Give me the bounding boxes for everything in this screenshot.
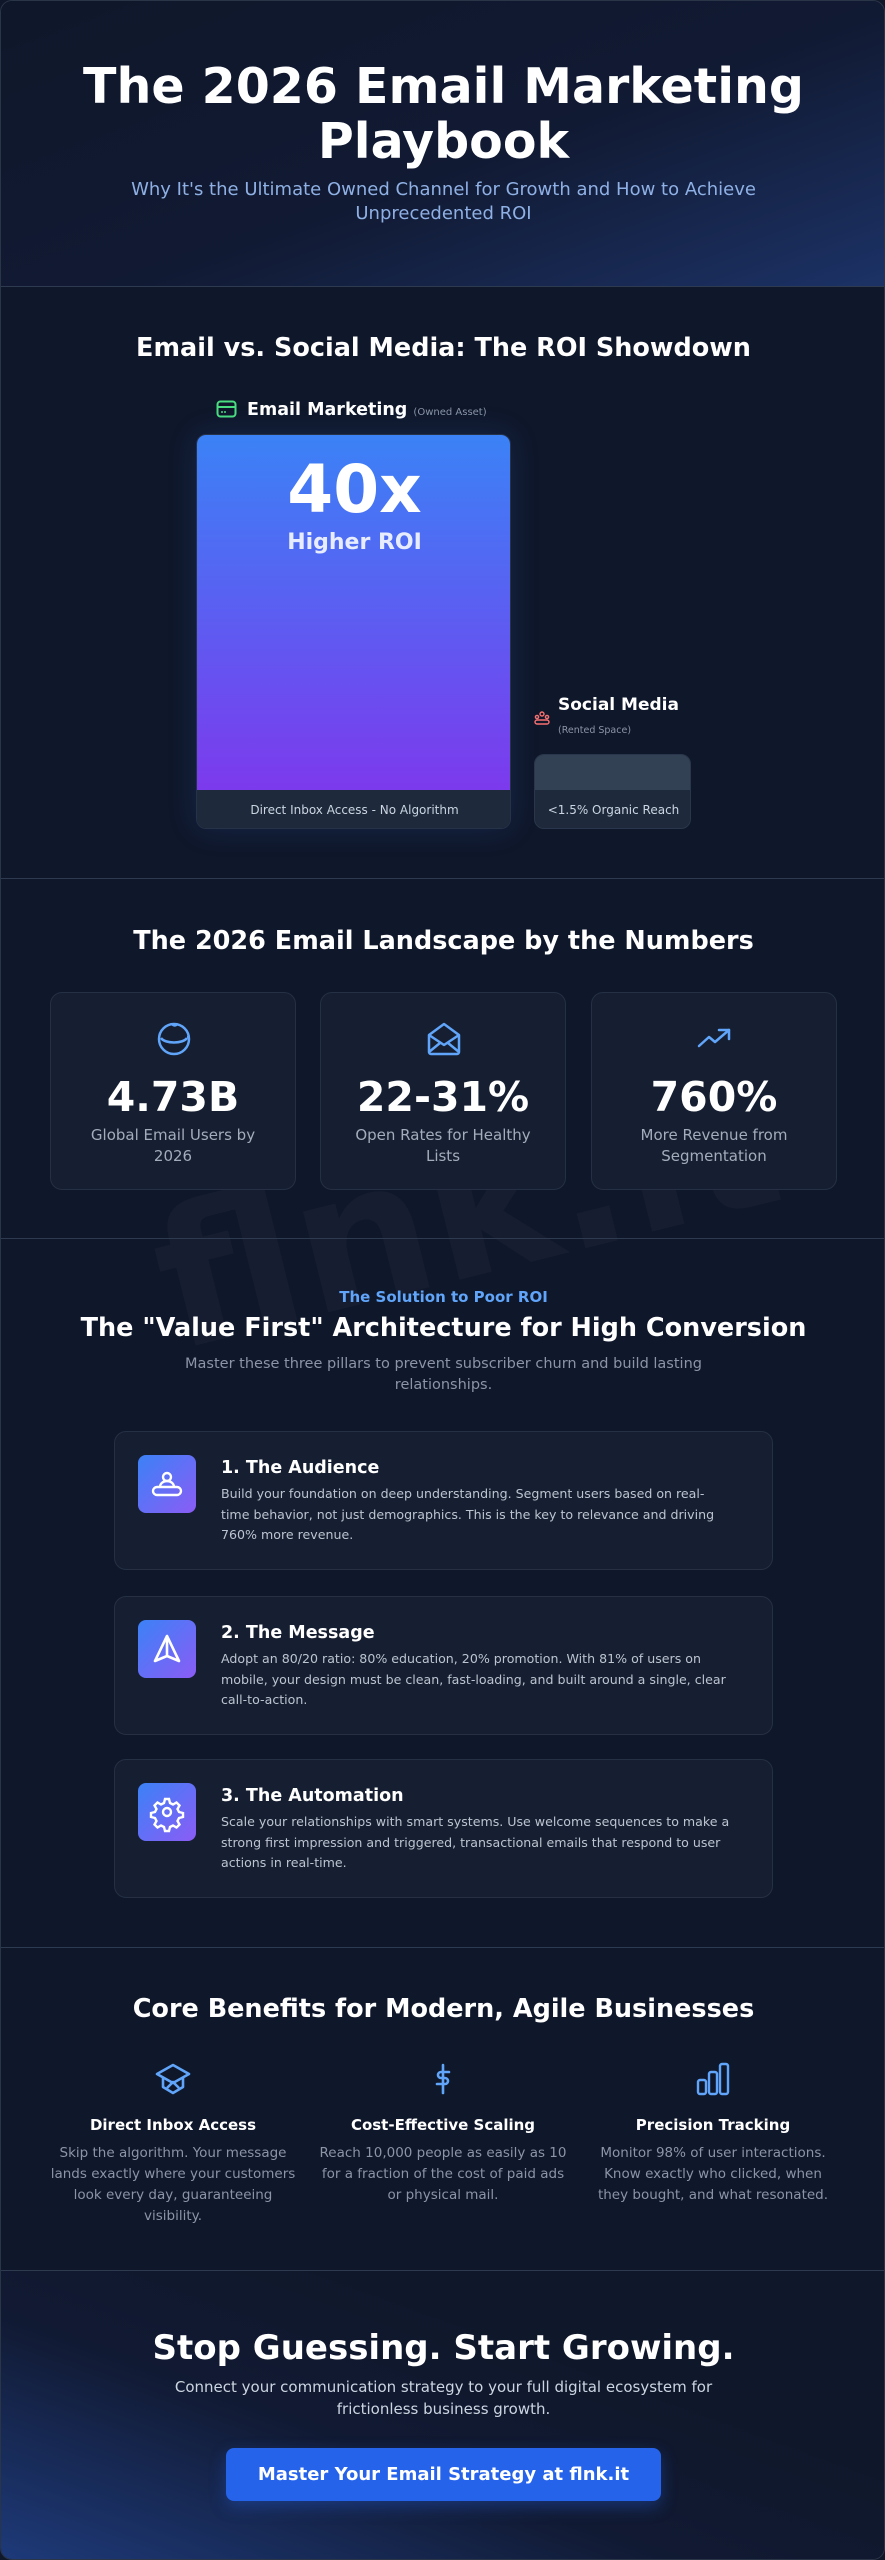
pillar: automation: 3. The Automation (221, 1786, 404, 1806)
kicker: The Solution to Poor ROI (339, 1288, 548, 1306)
stat: 40x: 40x (287, 451, 422, 528)
stat card: revenue: More Revenue from Segmentation (641, 1126, 787, 1165)
icon: cap (156, 2064, 190, 2094)
icon: trend (698, 1028, 730, 1048)
watermark: flnk.it (134, 1027, 799, 1394)
pillar: message (114, 1596, 773, 1735)
pillar: message: Adopt an 80/20 ratio: 80% education, 20% promotion. With 81% of users on mobile, your design must be clean, fast-loading, and built around a single, clear call-to-action. (221, 1651, 726, 1707)
heading: numbers: The 2026 Email Landscape by the Numbers (133, 926, 754, 956)
stat card: open rates: 22-31% (357, 1073, 529, 1121)
bar: social (534, 754, 691, 829)
CTA background (1, 2271, 885, 2560)
bar: social: <1.5% Organic Reach (548, 803, 679, 817)
benefit: tracking (598, 2062, 828, 2203)
icon: card (216, 400, 236, 418)
heading: core benefits: Core Benefits for Modern, Agile Businesses (133, 1994, 754, 2024)
CTA button: Master Your Email Strategy at flnk.it (258, 2464, 629, 2485)
text: higher ROI: Higher ROI (287, 530, 422, 555)
label: social media: (Rented Space) (558, 725, 631, 736)
benefit: inbox (51, 2064, 295, 2224)
heading: architecture: The "Value First" Architecture for High Conversion (81, 1313, 806, 1343)
icon: people (534, 711, 550, 725)
benefit: inbox: Skip the algorithm. Your message lands exactly where your customers look every day, guaranteeing visibility. (51, 2145, 295, 2224)
icon: dollar (436, 2064, 450, 2094)
stat card: revenue: 760% (651, 1073, 777, 1121)
header background (1, 1, 885, 286)
pillar: audience: time behavior, not just demographics. This is the key to relevance and driving 760% more revenue. (221, 1507, 714, 1542)
icon: globe (158, 1022, 190, 1056)
stat card: users (50, 992, 296, 1190)
pillar: automation (114, 1759, 773, 1898)
pillar: audience (114, 1431, 773, 1570)
benefit: cost: Reach 10,000 people as easily as 10 for a fraction of the cost of paid ads or physical mail. (320, 2145, 566, 2203)
benefit: cost: Cost-Effective Scaling (351, 2116, 535, 2134)
pillar: message: 2. The Message (221, 1623, 375, 1643)
benefit: tracking: Monitor 98% of user interactions. Know exactly who clicked, when they bought, and what resonated. (598, 2145, 828, 2203)
stat card: open rates: Open Rates for Healthy Lists (355, 1126, 531, 1165)
stat card: users: 4.73B (107, 1073, 239, 1121)
footer: direct inbox: Direct Inbox Access - No Algorithm (250, 803, 459, 817)
stat card: revenue (591, 992, 837, 1190)
benefit: cost (320, 2064, 566, 2203)
icon: bars (696, 2062, 730, 2096)
benefit: tracking: Precision Tracking (636, 2116, 790, 2134)
pillar: automation: Scale your relationships with smart systems. Use welcome sequences to make a strong first impression and triggered, transactional emails that respond to user actions in real-time. (221, 1814, 729, 1870)
pillar: audience: Build your foundation on deep understanding. Segment users based on real- (221, 1486, 704, 1501)
label: email marketing: Email Marketing (Owned Asset) (247, 400, 487, 420)
title: Playbook (318, 113, 569, 170)
CTA subtext: Connect your communication strategy to your full digital ecosystem for frictionless business growth. (175, 2378, 712, 2418)
CTA heading: Stop Guessing. Start Growing. (153, 2328, 734, 2368)
icon: gear (138, 1783, 196, 1841)
CTA button (226, 2448, 661, 2501)
title (83, 58, 804, 170)
label: social media (534, 695, 679, 736)
heading: ROI showdown: Email vs. Social Media: The ROI Showdown (136, 333, 751, 363)
title: The 2026 Email Marketing (83, 58, 804, 115)
subtitle: Why It's the Ultimate Owned Channel for Growth and How to Achieve Unprecedented ROI (131, 179, 756, 224)
icon: audience (138, 1455, 196, 1513)
stat card: open rates (320, 992, 566, 1190)
pillar: audience: 1. The Audience (221, 1458, 379, 1478)
label: social media: Social Media (558, 695, 679, 715)
benefit: inbox: Direct Inbox Access (90, 2116, 256, 2134)
bar: email (196, 434, 511, 829)
icon: envelope (428, 1022, 460, 1056)
stat card: users: Global Email Users by 2026 (91, 1126, 255, 1165)
subtext: Master these three pillars to prevent subscriber churn and build lasting relationships. (185, 1356, 702, 1393)
footer: direct inbox (197, 790, 512, 830)
icon: send (138, 1620, 196, 1678)
